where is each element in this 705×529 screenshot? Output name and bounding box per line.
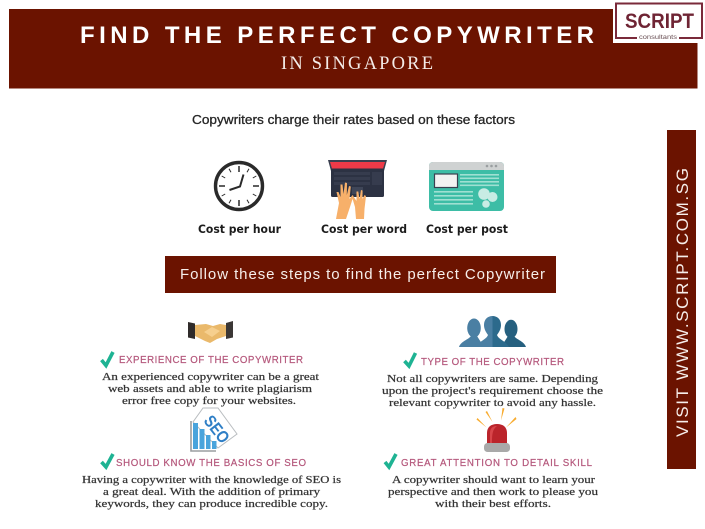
icon: check mark xyxy=(102,454,113,467)
logo: Script Consultants: consultants xyxy=(639,34,678,41)
header banner xyxy=(9,9,698,88)
step text: error free copy for your websites. xyxy=(122,396,296,407)
label: cost per hour: Cost per hour xyxy=(198,222,281,236)
step text: A copywriter should want to learn your xyxy=(392,475,596,486)
logo: Script Consultants xyxy=(613,0,705,43)
icon: handshake xyxy=(188,321,233,343)
step: attention to detail xyxy=(385,408,599,510)
step heading: EXPERIENCE OF THE COPYWRITER xyxy=(119,355,303,366)
step text xyxy=(82,475,341,510)
icon: group of people xyxy=(459,316,526,347)
logo: Script Consultants: SCRIPT xyxy=(625,9,694,33)
step text: a great deal. With the addition of primary xyxy=(103,487,321,498)
label: cost per word: Cost per word xyxy=(321,222,407,236)
step heading: GREAT ATTENTION TO DETAIL SKILL xyxy=(401,458,593,469)
subtitle: IN SINGAPORE xyxy=(281,54,433,74)
step text xyxy=(102,372,319,407)
step text: relevant copywriter to avoid any hassle. xyxy=(389,398,596,409)
step text: perspective and then work to please you xyxy=(388,487,599,498)
step text: Having a copywriter with the knowledge of SEO is xyxy=(82,475,341,486)
icon: check mark xyxy=(102,352,113,366)
steps heading band: Follow these steps to find the perfect Copywriter xyxy=(180,266,545,283)
icon: clock xyxy=(216,162,262,210)
steps heading band xyxy=(165,256,556,293)
step text xyxy=(382,374,603,409)
title: FIND THE PERFECT COPYWRITER xyxy=(80,22,594,49)
icon: web page xyxy=(429,162,504,211)
step: type of the copywriter xyxy=(382,316,603,409)
icon: check mark xyxy=(404,353,416,366)
step: basics of SEO xyxy=(82,408,341,510)
label: cost per post: Cost per post xyxy=(426,222,508,236)
icon: check mark xyxy=(385,454,396,467)
icon: laptop with hands xyxy=(328,160,387,219)
sidebar: visit website: VISIT WWW.SCRIPT.COM.SG xyxy=(673,168,692,437)
step text: Not all copywriters are same. Depending xyxy=(387,374,599,385)
step text: keywords, they can produce incredible copy. xyxy=(95,499,328,510)
icon: SEO tag and bar chart: SEO xyxy=(200,412,233,447)
sidebar: visit website xyxy=(667,130,696,469)
step text: web assets and able to write plagiarism xyxy=(108,384,313,395)
step: experience of the copywriter xyxy=(102,321,319,407)
step text: An experienced copywriter can be a great xyxy=(102,372,319,383)
step text: upon the project's requirement choose the xyxy=(382,386,603,397)
step text: with their best efforts. xyxy=(435,499,551,510)
intro text: Copywriters charge their rates based on these factors xyxy=(192,112,516,127)
step text xyxy=(388,475,599,510)
step heading: SHOULD KNOW THE BASICS OF SEO xyxy=(116,458,306,469)
step heading: TYPE OF THE COPYWRITER xyxy=(421,357,564,368)
icon: red alarm light xyxy=(476,408,516,452)
